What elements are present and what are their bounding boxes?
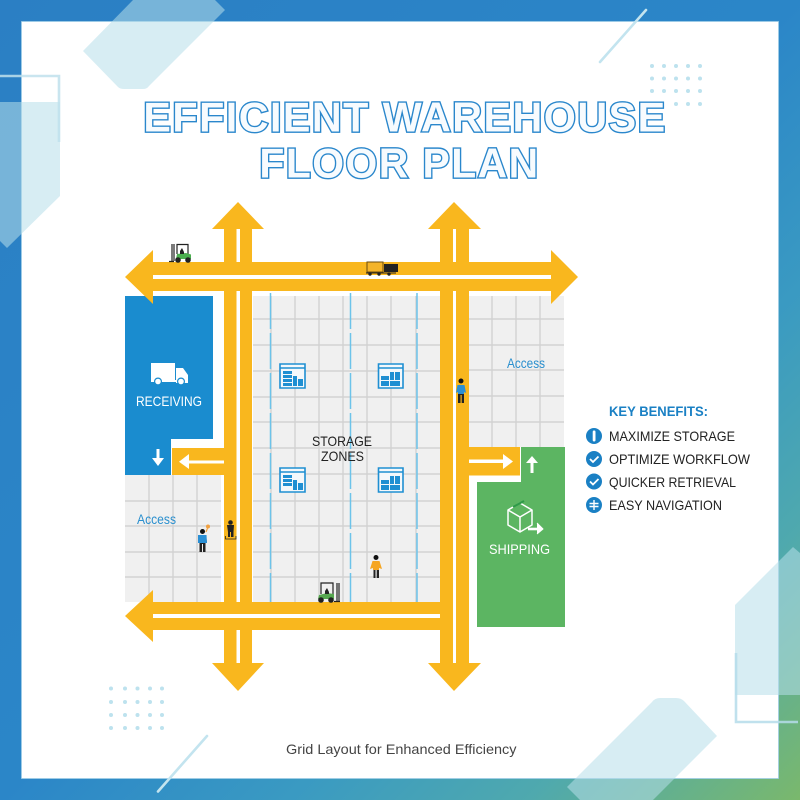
benefit: maximize storage: MAXIMIZE STORAGE	[609, 428, 735, 444]
caption: Grid Layout for Enhanced Efficiency	[286, 741, 516, 757]
icon: forklift bottom	[318, 583, 340, 603]
access label right: Access	[507, 355, 545, 371]
icon: shelf top left	[280, 364, 305, 388]
receiving zone: RECEIVING	[136, 393, 202, 409]
benefit: optimize workflow: OPTIMIZE WORKFLOW	[609, 451, 751, 467]
icon: person in orange	[370, 555, 382, 578]
shipping zone: SHIPPING	[489, 541, 550, 557]
icon: shelf bottom left	[280, 468, 305, 492]
icon: forklift top	[169, 244, 191, 263]
key benefits list	[586, 403, 751, 513]
storage zones label: ZONES	[321, 448, 364, 464]
shipping zone	[477, 447, 565, 627]
receiving zone	[125, 296, 213, 475]
access label left: Access	[137, 511, 176, 527]
icon: person with orange marker	[198, 524, 210, 552]
key benefits list: KEY BENEFITS:	[609, 403, 708, 419]
benefit: quicker retrieval: QUICKER RETRIEVAL	[609, 474, 736, 490]
icon: shelf top right	[378, 364, 403, 388]
icon: cart and crate on top aisle	[366, 262, 398, 276]
icon: box	[508, 501, 543, 534]
icon: shelf bottom right	[378, 468, 403, 492]
access area right	[469, 296, 564, 447]
title: EFFICIENT WAREHOUSE	[143, 94, 667, 141]
benefit: easy navigation: EASY NAVIGATION	[609, 497, 722, 513]
icon: worker on left aisle	[226, 520, 236, 539]
icon: person on right aisle	[456, 378, 466, 403]
storage zones label	[312, 433, 372, 464]
access area left	[125, 475, 221, 602]
yellow aisle arrows	[125, 202, 578, 691]
storage zones grid	[253, 293, 440, 602]
icon: truck	[151, 363, 188, 385]
title: FLOOR PLAN	[259, 140, 540, 187]
storage zones label: STORAGE	[312, 433, 372, 449]
title	[143, 94, 667, 187]
